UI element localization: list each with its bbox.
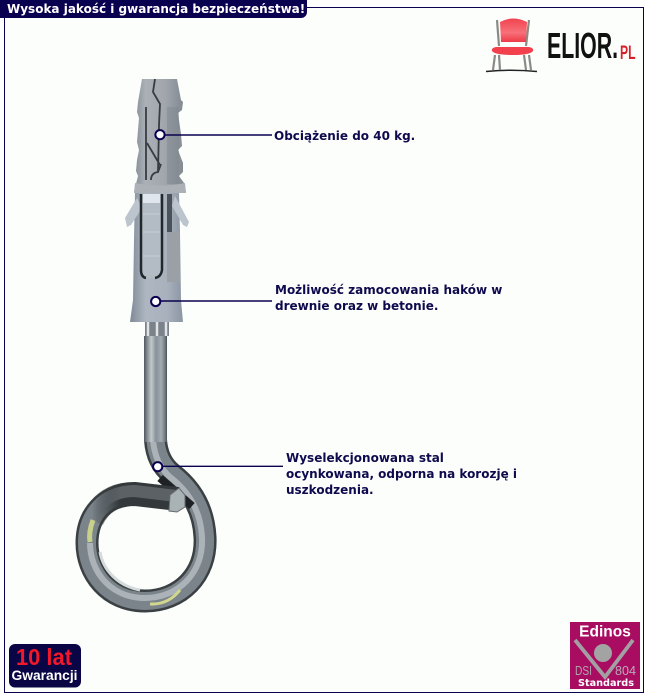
badge: 10 years warranty [9,644,81,688]
plug collar [134,183,186,193]
leader line: mounting [151,297,272,306]
badge: Edinos standards: Standards [578,678,634,689]
logo wordmark: PL [620,43,636,64]
text: steel: uszkodzenia. [286,483,374,497]
badge: Edinos standards: DSI [575,664,592,678]
text: steel: Wyselekcjonowana stal [286,451,444,465]
plug lower sleeve [130,193,183,322]
plug side wings [125,196,189,227]
badge: Edinos standards: Edinos [579,624,631,640]
plug window [141,194,162,278]
steel hook [87,322,205,604]
text: load capacity: Obciążenie do 40 kg. [274,129,415,143]
text: steel [286,451,517,497]
hook stem highlight [144,336,167,442]
hook body and ring [87,336,205,604]
leader line: steel [153,462,283,471]
text: mounting: drewnie oraz w betonie. [275,299,438,313]
hook cut end [169,488,185,512]
plug slits [146,79,161,180]
hook neck thread [145,322,169,336]
badge: Edinos standards: 804 [615,663,636,678]
plug upper barbed section [134,79,186,192]
badge: Edinos standards [570,622,640,689]
badge: 10 years warranty: 10 lat [16,644,72,670]
icon: elior chair logo [486,18,537,72]
badge: 10 years warranty: Gwarancji [12,668,78,683]
text: mounting [275,283,502,313]
title banner: Wysoka jakość i gwarancja bezpieczeństwa! [7,2,305,16]
wall plug [125,79,189,322]
text: mounting: Możliwość zamocowania haków w [275,283,502,297]
hook shadow at the crossing [160,478,192,506]
text: steel: ocynkowana, odporna na korozję i [286,467,517,481]
hook upper ring arm [92,494,178,520]
leader line: load [155,130,272,139]
